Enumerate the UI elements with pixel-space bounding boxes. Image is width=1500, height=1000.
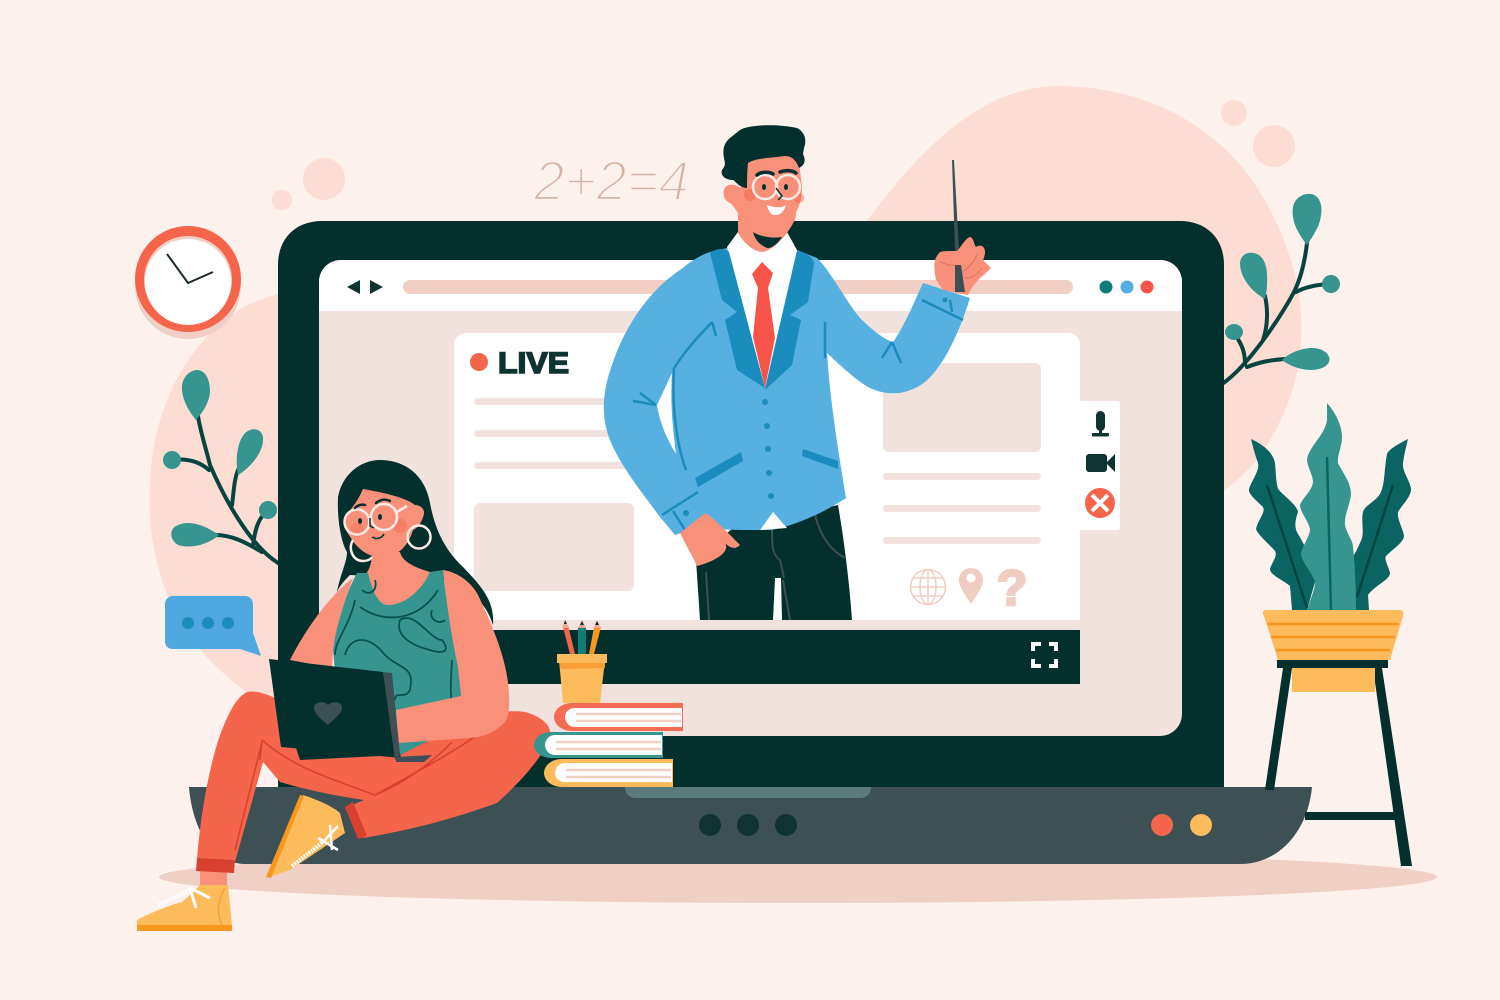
head	[722, 125, 805, 232]
window dots	[1100, 280, 1154, 294]
laptop screen frame	[278, 221, 1224, 790]
jacket	[604, 248, 970, 535]
head	[344, 489, 430, 561]
plant branch right	[1222, 194, 1340, 384]
background blob right	[866, 86, 1302, 497]
shirt and neck	[727, 232, 797, 392]
necktie	[752, 262, 775, 388]
stool top	[1277, 660, 1388, 692]
jacket details	[695, 399, 838, 499]
ground shadow	[159, 851, 1437, 903]
rear shoe	[137, 885, 232, 931]
right image placeholder	[883, 363, 1041, 452]
student laptop	[269, 659, 432, 762]
raised hand	[934, 237, 991, 295]
book teal	[534, 732, 663, 758]
pencils	[562, 620, 601, 654]
left image placeholder	[474, 503, 634, 591]
laptop base	[189, 787, 1312, 864]
equation: 2+2=4	[533, 149, 689, 212]
video card	[454, 333, 1080, 620]
trousers	[197, 692, 550, 862]
live badge	[470, 347, 569, 380]
right arm	[396, 570, 509, 743]
background blob left	[149, 292, 290, 720]
tank top	[333, 570, 462, 760]
icon: question mark: ?	[997, 560, 1027, 616]
stack of books and pencil cup	[534, 620, 683, 787]
icon: wall clock	[135, 226, 241, 339]
plant leaves	[1249, 403, 1411, 610]
book coral	[554, 703, 683, 731]
icon: microphone	[1092, 411, 1109, 436]
glasses and eyes	[753, 175, 800, 199]
decorative bubbles	[272, 100, 1295, 210]
neck	[360, 552, 430, 605]
book yellow	[544, 759, 673, 787]
glasses	[344, 504, 407, 534]
hair	[722, 125, 805, 188]
right text lines	[883, 473, 1041, 544]
plant branch left	[163, 370, 278, 563]
front shoe and cuff	[266, 795, 367, 878]
trousers	[696, 505, 852, 620]
icon: map pin	[959, 568, 983, 604]
heart	[314, 702, 342, 725]
hair back	[337, 460, 493, 625]
teacher	[604, 125, 991, 620]
pencil cup	[557, 654, 607, 703]
side controls panel	[1080, 401, 1120, 530]
address bar	[403, 280, 1073, 294]
earrings	[408, 526, 430, 548]
navigation arrows	[347, 280, 383, 294]
left arm	[290, 578, 353, 668]
browser window	[319, 260, 1182, 736]
icon: globe	[910, 569, 946, 605]
potted plant on stool	[1249, 403, 1412, 866]
icon: close button	[1085, 488, 1115, 518]
left text lines	[474, 398, 644, 469]
hand in pocket	[680, 513, 740, 566]
lapels	[710, 249, 814, 390]
live badge: LIVE	[498, 347, 569, 380]
video control bar	[454, 630, 1080, 684]
icon: video camera	[1086, 454, 1115, 472]
student	[137, 460, 550, 931]
speech bubble	[165, 596, 261, 656]
icon: fullscreen	[1033, 644, 1056, 666]
pointer stick	[952, 160, 959, 250]
stool legs	[1265, 668, 1412, 866]
pot	[1263, 610, 1403, 660]
gap between arm and body	[657, 373, 676, 454]
ankle and cuff	[196, 858, 235, 890]
